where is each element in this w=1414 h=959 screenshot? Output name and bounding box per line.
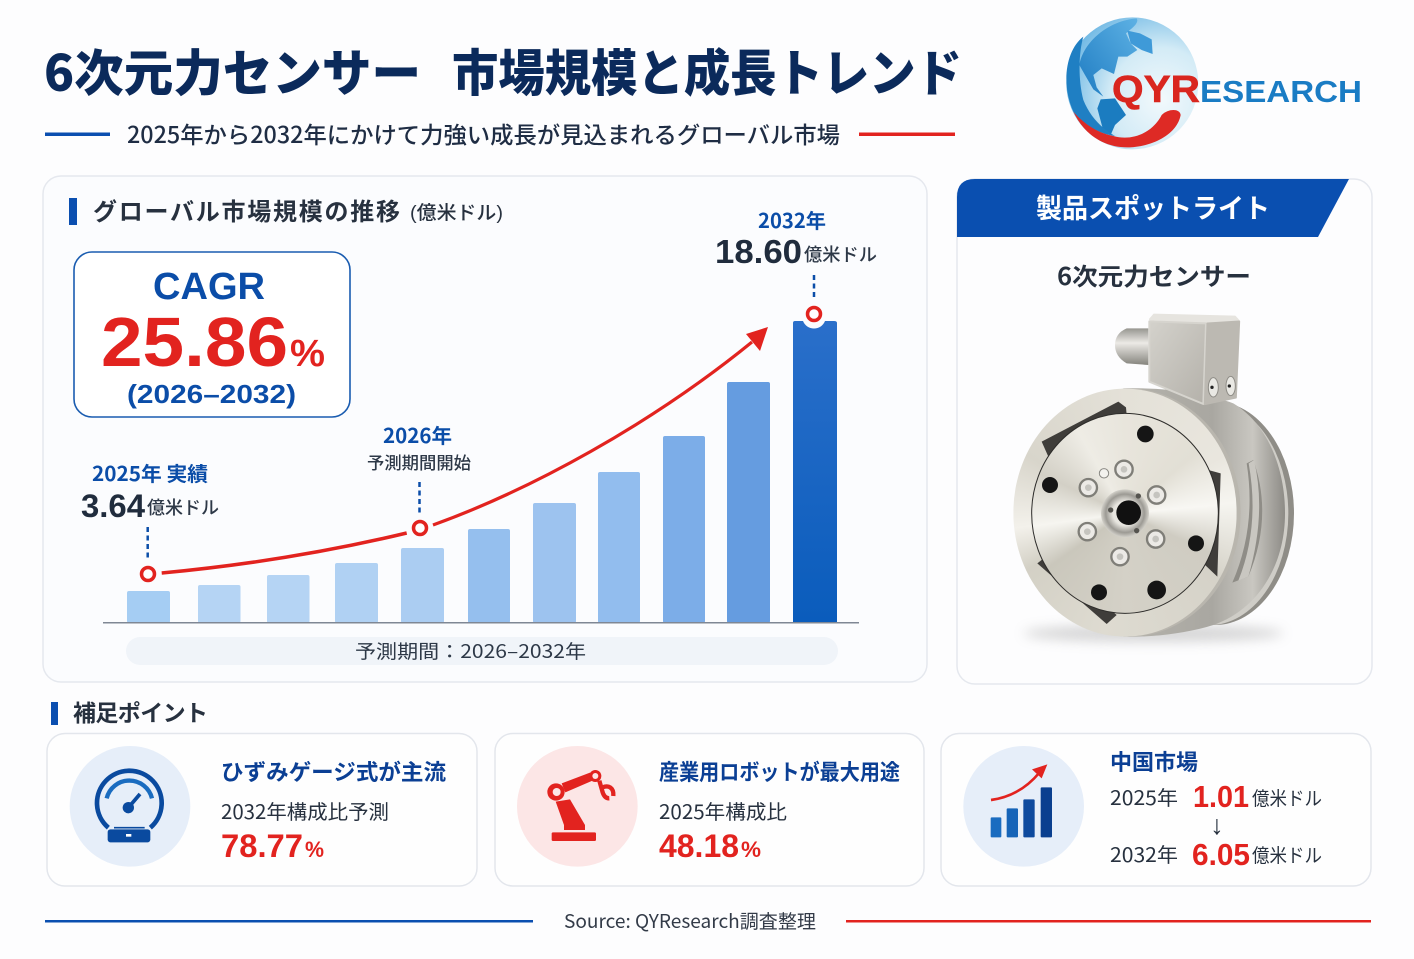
trend arrow (162, 327, 768, 573)
panel heading (69, 198, 503, 226)
title (44, 34, 962, 106)
CAGR callout: 25.86 (101, 303, 288, 381)
spotlight banner: 製品スポットライト (1036, 194, 1270, 224)
title: 6次元力センサー (44, 34, 421, 106)
logo: QYResearch: QYR (1112, 69, 1200, 111)
card text (659, 760, 900, 864)
card text: 1.01 (1193, 779, 1249, 814)
card text: 6.05 (1192, 837, 1250, 872)
CAGR callout (74, 252, 350, 417)
card text: 中国市場 (1110, 750, 1198, 775)
card text: 78.77 (221, 828, 303, 864)
card: strain gauge (47, 734, 477, 886)
icon: gauge (70, 746, 190, 867)
annotation: 2026 forecast start: 2026年 (383, 420, 452, 449)
product image: six-axis force sensor (1013, 315, 1294, 642)
title: 市場規模と成長トレンド (452, 34, 962, 106)
CAGR callout: % (290, 333, 325, 375)
card text: 48.18 (659, 828, 739, 864)
annotation: 2026 forecast start: 予測期間開始 (367, 454, 471, 473)
card text: 産業用ロボットが最大用途 (659, 760, 900, 785)
forecast period pill: 予測期間：2026–2032年 (355, 637, 586, 664)
annotation: 2032 value: 億米ドル (804, 245, 877, 265)
source footer: Source: QYResearch調査整理 (564, 907, 816, 934)
bar chart (103, 321, 859, 624)
icon: growth chart (963, 746, 1084, 867)
logo: QYResearch (1066, 17, 1362, 149)
card text: 2025年構成比 (659, 796, 787, 825)
card text: 億米ドル (1252, 788, 1322, 810)
CAGR callout: CAGR (153, 266, 265, 308)
annotation: 2025 actual: 3.64 (81, 488, 145, 524)
card text: 2025年 (1110, 782, 1178, 811)
logo: QYResearch: ESEARCH (1200, 74, 1362, 109)
card: China market (941, 734, 1371, 886)
annotation: 2032 value: 18.60 (715, 233, 802, 270)
card text: 2032年 (1110, 839, 1178, 868)
annotation: 2032 value: 2032年 (758, 205, 826, 234)
card text: ↓ (1210, 810, 1224, 840)
card text: 億米ドル (1252, 845, 1322, 867)
CAGR callout: (2026–2032) (127, 379, 296, 409)
panel heading: グローバル市場規模の推移 (93, 198, 400, 226)
product name: 6次元力センサー (1057, 257, 1251, 292)
subtitle: 2025年から2032年にかけて力強い成長が見込まれるグローバル市場 (127, 116, 840, 150)
card: industrial robots (495, 734, 924, 886)
card text: % (741, 837, 761, 862)
panel heading: (億米ドル) (410, 202, 503, 224)
card text: ひずみゲージ式が主流 (221, 760, 446, 785)
card text: 2032年構成比予測 (221, 796, 389, 825)
annotation: 2032 value (715, 205, 877, 320)
card text (221, 760, 446, 864)
supplementary points heading: 補足ポイント (73, 700, 208, 726)
forecast period pill (126, 637, 838, 665)
annotation: 2025 actual: 2025年 実績 (92, 458, 208, 487)
card text: % (305, 837, 324, 862)
annotation: 2025 actual: 億米ドル (147, 498, 219, 518)
spotlight banner (957, 179, 1349, 237)
annotation: 2026 forecast start (367, 420, 471, 534)
panel: global market size (43, 176, 927, 682)
icon: robot arm (517, 746, 638, 867)
card text (1110, 750, 1322, 872)
annotation: 2025 actual (81, 458, 219, 580)
panel: product spotlight (957, 179, 1372, 684)
